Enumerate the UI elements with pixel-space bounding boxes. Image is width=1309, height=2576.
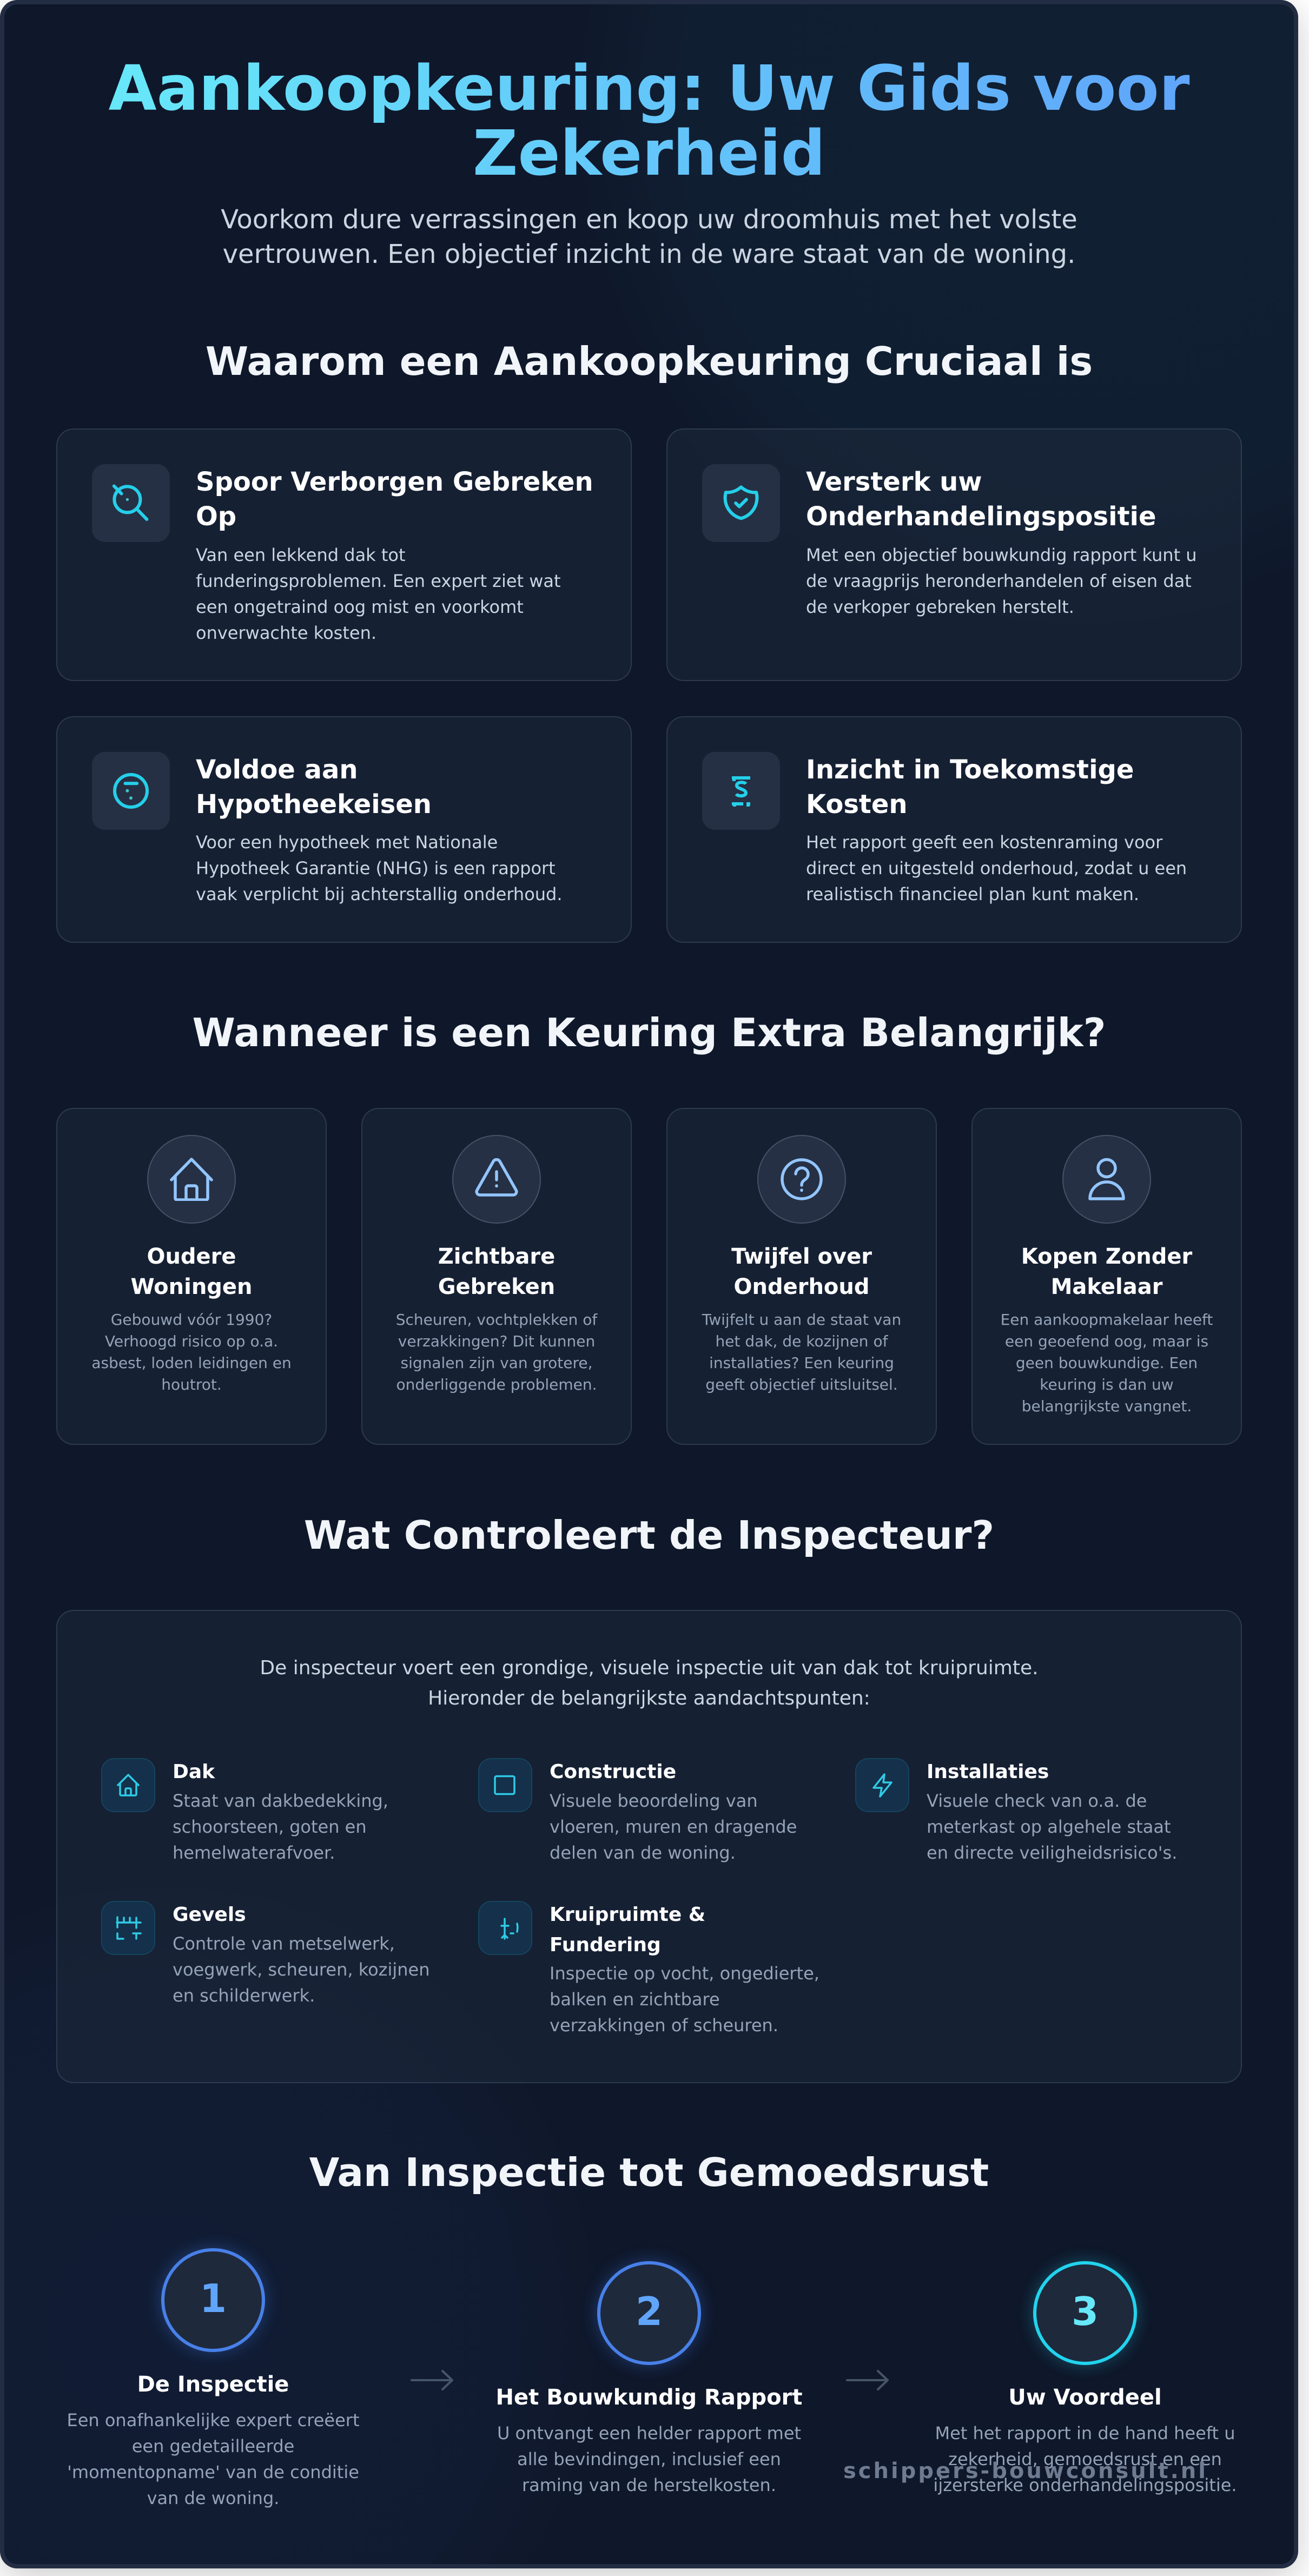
intro text	[260, 1656, 1039, 1709]
card text: onderliggende problemen.	[396, 1376, 597, 1393]
icon: magnifier	[92, 464, 170, 542]
step text: alle bevindingen, inclusief een	[517, 2449, 781, 2469]
item text: Visuele check van o.a. de	[927, 1791, 1147, 1811]
card heading: Kopen Zonder	[1021, 1244, 1192, 1269]
icon: brick wall	[101, 1901, 155, 1955]
card text: signalen zijn van grotere,	[400, 1354, 593, 1372]
heading: van inspectie tot gemoedsrust: Van Inspectie tot Gemoedsrust	[309, 2150, 989, 2195]
item text	[173, 1933, 429, 2006]
card text: het dak, de kozijnen of	[716, 1332, 888, 1350]
card heading: Voldoe aan	[196, 755, 358, 785]
card text: Twijfelt u aan de staat van	[702, 1311, 901, 1329]
item text: Inspectie op vocht, ongedierte,	[550, 1963, 819, 1984]
step text: ijzersterke onderhandelingspositie.	[933, 2475, 1237, 2495]
subtitle: Voorkom dure verrassingen en koop uw droomhuis met het volste	[221, 204, 1077, 235]
item text: balken en zichtbare	[550, 1989, 720, 2010]
card heading: Zichtbare	[438, 1244, 555, 1269]
card heading	[1021, 1244, 1192, 1299]
card text: Met een objectief bouwkundig rapport kunt u	[806, 545, 1197, 565]
icon: question circle	[757, 1135, 846, 1224]
title	[108, 52, 1190, 190]
item heading: Gevels	[173, 1904, 246, 1926]
title: Aankoopkeuring: Uw Gids voor	[108, 52, 1190, 125]
step 3	[928, 2261, 1242, 2521]
step text: Met het rapport in de hand heeft u	[935, 2423, 1235, 2443]
item heading: Dak	[173, 1761, 215, 1783]
heading: waarom: Waarom een Aankoopkeuring Cruciaal is	[206, 339, 1093, 384]
card text	[806, 832, 1187, 904]
card heading	[130, 1244, 253, 1299]
panel: versterk onderhandelingspositie	[666, 428, 1242, 681]
card text: Verhoogd risico op o.a.	[105, 1332, 278, 1350]
icon: warning triangle	[452, 1135, 541, 1224]
card text: geen bouwkundige. Een	[1016, 1354, 1198, 1372]
icon: circle with dash and dots	[92, 752, 170, 830]
number circle 3	[1033, 2261, 1137, 2365]
card text: Voor een hypotheek met Nationale	[196, 832, 498, 853]
item heading: Kruipruimte &	[550, 1904, 705, 1926]
step 1	[56, 2248, 370, 2508]
card heading	[196, 755, 432, 820]
arrow 1	[409, 2368, 455, 2392]
item text: Staat van dakbedekking,	[173, 1791, 388, 1811]
icon: person	[1062, 1135, 1151, 1224]
card text: Een aankoopmakelaar heeft	[1001, 1311, 1213, 1329]
step text	[928, 2420, 1242, 2498]
card text: Het rapport geeft een kostenraming voor	[806, 832, 1162, 853]
item text: vloeren, muren en dragende	[550, 1817, 797, 1837]
card text: installaties? Een keuring	[709, 1354, 894, 1372]
step text	[56, 2407, 370, 2511]
card heading	[806, 755, 1134, 820]
card text: Scheuren, vochtplekken of	[396, 1311, 597, 1329]
card text	[806, 545, 1197, 617]
item text: meterkast op algehele staat	[927, 1817, 1171, 1837]
item: kruipruimte en fundering	[478, 1901, 819, 2036]
card heading	[196, 467, 593, 532]
subtitle	[221, 204, 1077, 269]
card heading: Hypotheekeisen	[196, 789, 432, 820]
icon: house	[147, 1135, 236, 1224]
card text	[702, 1311, 901, 1393]
item text: verzakkingen of scheuren.	[550, 2015, 778, 2036]
icon: lightning bolt	[855, 1758, 909, 1812]
card text	[1001, 1311, 1213, 1415]
item text: Controle van metselwerk,	[173, 1933, 395, 1954]
panel: inzicht in toekomstige kosten	[666, 716, 1242, 943]
title: Zekerheid	[473, 117, 825, 190]
step text	[492, 2420, 806, 2498]
arrow 2	[844, 2368, 891, 2392]
item heading: Installaties	[927, 1761, 1049, 1783]
card heading: Onderhoud	[733, 1274, 870, 1299]
intro text: Hieronder de belangrijkste aandachtspunten:	[428, 1687, 870, 1709]
item text: schoorsteen, goten en	[173, 1817, 367, 1837]
step text: 'momentopname' van de conditie	[67, 2462, 359, 2482]
card text	[196, 832, 563, 904]
card heading: Makelaar	[1051, 1274, 1162, 1299]
card heading: Inzicht in Toekomstige	[806, 755, 1134, 785]
item: gevels	[101, 1901, 429, 2006]
heading: wanneer: Wanneer is een Keuring Extra Belangrijk?	[193, 1010, 1106, 1055]
card text: Van een lekkend dak tot	[196, 545, 406, 565]
card text: belangrijkste vangnet.	[1022, 1397, 1192, 1415]
card text: funderingsproblemen. Een expert ziet wat	[196, 571, 561, 591]
subtitle: vertrouwen. Een objectief inzicht in de ware staat van de woning.	[223, 239, 1075, 269]
item text: hemelwaterafvoer.	[173, 1842, 335, 1863]
card text: geeft objectief uitsluitsel.	[705, 1376, 898, 1393]
card text: Gebouwd vóór 1990?	[111, 1311, 272, 1329]
item: installaties	[855, 1758, 1177, 1863]
panel: voldoe aan hypotheekeisen	[56, 716, 632, 943]
item: constructie	[478, 1758, 797, 1863]
panel: kopen zonder makelaar	[971, 1108, 1242, 1445]
intro text: De inspecteur voert een grondige, visuele inspectie uit van dak tot kruipruimte.	[260, 1656, 1039, 1679]
card text: een ongetraind oog mist en voorkomt	[196, 597, 524, 617]
card text: verzakkingen? Dit kunnen	[398, 1332, 595, 1350]
step text: raming van de herstelkosten.	[522, 2475, 776, 2495]
step 2	[492, 2261, 806, 2521]
card heading: Onderhandelingspositie	[806, 501, 1156, 532]
step text: U ontvangt een helder rapport met	[497, 2423, 801, 2443]
card text: asbest, loden leidingen en	[91, 1354, 292, 1372]
step text: van de woning.	[147, 2488, 279, 2508]
card heading: Spoor Verborgen Gebreken	[196, 467, 593, 497]
card text	[196, 545, 561, 643]
item text: voegwerk, scheuren, kozijnen	[173, 1959, 429, 1980]
panel: oudere woningen	[56, 1108, 327, 1445]
number circle 1	[161, 2248, 265, 2352]
card heading: Oudere	[147, 1244, 236, 1269]
icon: small house	[101, 1758, 155, 1812]
icon: currency	[702, 752, 780, 830]
card heading: Kosten	[806, 789, 908, 820]
step heading: Uw Voordeel	[1008, 2385, 1162, 2410]
item text: en directe veiligheidsrisico's.	[927, 1842, 1177, 1863]
panel: inspectie	[56, 1610, 1242, 2083]
card heading	[731, 1244, 872, 1299]
card text: Hypotheek Garantie (NHG) is een rapport	[196, 858, 556, 879]
card text: direct en uitgesteld onderhoud, zodat u een	[806, 858, 1187, 879]
card text: onverwachte kosten.	[196, 623, 376, 643]
step heading: Het Bouwkundig Rapport	[496, 2385, 802, 2410]
card text: vaak verplicht bij achterstallig onderhoud.	[196, 884, 563, 904]
card text: een geoefend oog, maar is	[1005, 1332, 1208, 1350]
card heading: Twijfel over	[731, 1244, 872, 1269]
item heading: Fundering	[550, 1934, 661, 1956]
icon: shield check	[702, 464, 780, 542]
number circle 2	[597, 2261, 701, 2365]
item: dak	[101, 1758, 388, 1863]
card text: de verkoper gebreken herstelt.	[806, 597, 1074, 617]
card text	[396, 1311, 598, 1393]
item text	[927, 1791, 1177, 1863]
item heading	[550, 1904, 705, 1956]
card text: keuring is dan uw	[1040, 1376, 1174, 1393]
watermark: schippers-bouwconsult.nl	[843, 2459, 1208, 2483]
heading: wat controleert: Wat Controleert de Inspecteur?	[304, 1512, 994, 1558]
icon: square	[478, 1758, 532, 1812]
card text: houtrot.	[161, 1376, 222, 1393]
number circle 3: 3	[1072, 2289, 1099, 2334]
card text	[91, 1311, 292, 1393]
item heading: Constructie	[550, 1761, 676, 1783]
item text: en schilderwerk.	[173, 1985, 315, 2006]
icon: foundation	[478, 1901, 532, 1955]
step text: zekerheid, gemoedsrust en een	[948, 2449, 1222, 2469]
number circle 2: 2	[636, 2289, 663, 2334]
panel: twijfel over onderhoud	[666, 1108, 937, 1445]
item text	[550, 1791, 797, 1863]
card heading: Gebreken	[438, 1274, 555, 1299]
item text: delen van de woning.	[550, 1842, 736, 1863]
card heading: Op	[196, 501, 236, 532]
panel: spoor verborgen gebreken op	[56, 428, 632, 681]
step heading: De Inspectie	[137, 2372, 289, 2397]
card text: realistisch financieel plan kunt maken.	[806, 884, 1139, 904]
step text: een gedetailleerde	[132, 2436, 294, 2456]
step text: Een onafhankelijke expert creëert	[67, 2410, 359, 2430]
item text	[550, 1963, 819, 2036]
panel: zichtbare gebreken	[361, 1108, 632, 1445]
item text	[173, 1791, 388, 1863]
number circle 1: 1	[200, 2276, 227, 2321]
card text: de vraagprijs heronderhandelen of eisen dat	[806, 571, 1192, 591]
item text: Visuele beoordeling van	[550, 1791, 758, 1811]
card heading: Woningen	[130, 1274, 253, 1299]
card heading	[806, 467, 1156, 532]
card heading: Versterk uw	[806, 467, 982, 497]
card heading	[438, 1244, 555, 1299]
